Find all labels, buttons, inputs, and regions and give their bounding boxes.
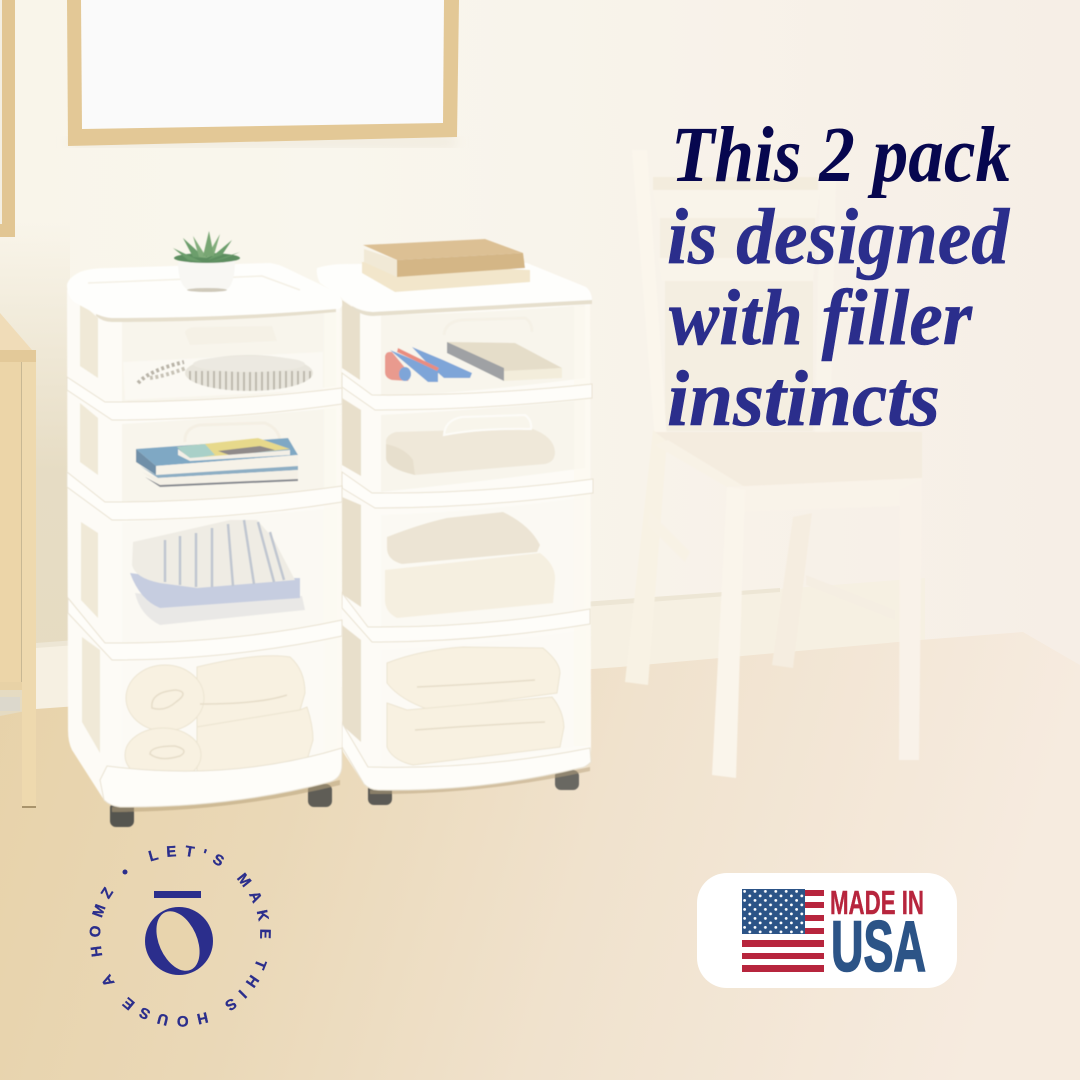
seal dot (122, 870, 128, 874)
floor (0, 632, 1080, 1080)
folded striped clothes (130, 520, 305, 625)
wheels (368, 770, 579, 805)
clips (385, 347, 472, 382)
stacked books (136, 438, 298, 487)
drawer 1 handle (185, 326, 277, 345)
headline line 4: instincts (667, 356, 940, 443)
drawer 2 window (380, 400, 585, 492)
headline line 1: This 2 pack (671, 112, 1011, 199)
wall background (0, 0, 1080, 720)
folded blankets (385, 512, 555, 618)
storage tower: left (67, 231, 342, 827)
drawer 2 handle (185, 423, 280, 442)
seal logo letter o (145, 904, 213, 978)
chair back panel shading (653, 177, 818, 431)
wall art frame: main (67, 0, 459, 146)
brand seal (90, 845, 271, 1027)
silver bracelet and beads (138, 355, 315, 391)
side cabinet (0, 313, 36, 808)
drawer 1 window (380, 305, 585, 397)
drawer 3 window (120, 508, 336, 645)
badge background (697, 873, 957, 988)
headline line 2: is designed (667, 194, 1010, 281)
made in USA badge (697, 873, 957, 988)
tower lid (317, 263, 592, 316)
chair back legs (625, 430, 667, 685)
drawer fronts (342, 373, 593, 790)
side inset panels (80, 302, 100, 753)
rolled towels (125, 656, 313, 782)
storage tower: right (317, 239, 593, 805)
drawer fronts (67, 377, 342, 807)
seal ring text: LET'S MAKE THIS HOUSE A HOMZ (90, 845, 271, 1027)
side inset panels (342, 300, 361, 742)
usa text: USA (831, 908, 926, 987)
succulent plant (173, 231, 240, 263)
headline (667, 112, 1011, 443)
plant pot (178, 260, 235, 292)
drawer 4 window (120, 638, 336, 780)
wheels (110, 784, 332, 827)
front posts (368, 314, 381, 764)
folded beige towel (386, 428, 555, 475)
tower lid (67, 263, 342, 322)
drawer 3 window (380, 497, 585, 632)
wall art frame: left partial (0, 0, 15, 237)
chair apron (727, 478, 922, 512)
chair stretchers (648, 512, 690, 562)
top book stack (362, 239, 530, 292)
baseboard (36, 578, 925, 712)
front posts (107, 322, 122, 782)
seal logo macron bar (154, 891, 201, 898)
drawer 2 handle (444, 415, 531, 435)
folded towels (387, 647, 564, 765)
chair back posts (632, 150, 667, 440)
tower shadow (112, 780, 340, 812)
tower body (67, 290, 342, 807)
drawer 2 window (120, 408, 336, 503)
headline line 3: with filler (669, 275, 973, 362)
drawer 1 handle (444, 318, 532, 335)
chair (625, 150, 922, 778)
wall shading near cabinet (0, 220, 70, 720)
drawer 4 window (380, 630, 585, 770)
tower body (341, 290, 591, 790)
made in text: MADE IN (830, 884, 924, 921)
chair front legs (712, 487, 745, 778)
drawer 1 window (120, 312, 336, 403)
chair seat (655, 432, 922, 487)
notebook (447, 342, 562, 381)
american flag (742, 889, 824, 972)
tower shadow (370, 767, 590, 794)
